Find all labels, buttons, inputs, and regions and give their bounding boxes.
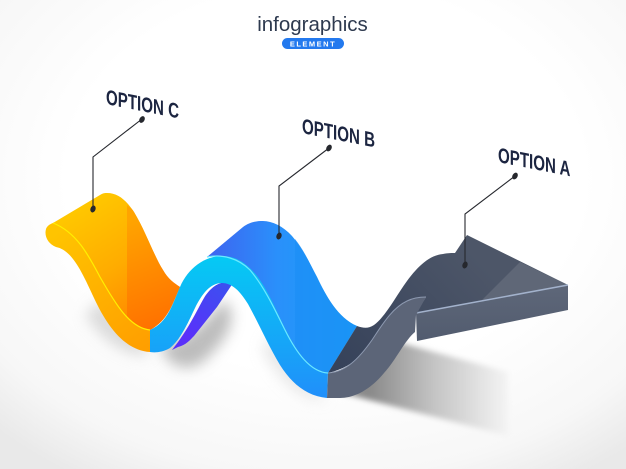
badge: element: ELEMENT — [290, 40, 336, 49]
arrow top surface — [328, 235, 568, 373]
orange top surface — [53, 193, 180, 330]
arrow light facet — [482, 262, 568, 300]
label: option C: OPTION C — [106, 85, 179, 123]
leader: option A — [462, 172, 518, 269]
arrow front face — [416, 285, 568, 341]
orange shaded surface — [127, 205, 180, 330]
leader: option C — [90, 116, 145, 213]
grey strip — [327, 297, 426, 398]
blue underside — [172, 282, 233, 350]
orange front strip — [45, 223, 150, 352]
title text: infographics: infographics — [257, 13, 368, 36]
cyan front strip — [150, 256, 328, 398]
arrow front highlight — [416, 285, 568, 313]
label: option A: OPTION A — [498, 143, 570, 181]
shadow: wave floor shadows — [85, 300, 509, 436]
yellow highlight line — [53, 223, 150, 330]
cyan highlight line — [207, 256, 328, 373]
blue top surface — [207, 221, 357, 373]
blue shaded surface — [295, 239, 357, 373]
wave ribbon: option C orange — [45, 193, 180, 352]
grey strip highlight — [328, 297, 426, 373]
wave ribbon: option B blue — [150, 221, 357, 398]
title — [257, 13, 368, 49]
leader: option B — [276, 144, 332, 240]
label: option B: OPTION B — [302, 114, 375, 152]
arrow: option A dark — [327, 235, 568, 398]
